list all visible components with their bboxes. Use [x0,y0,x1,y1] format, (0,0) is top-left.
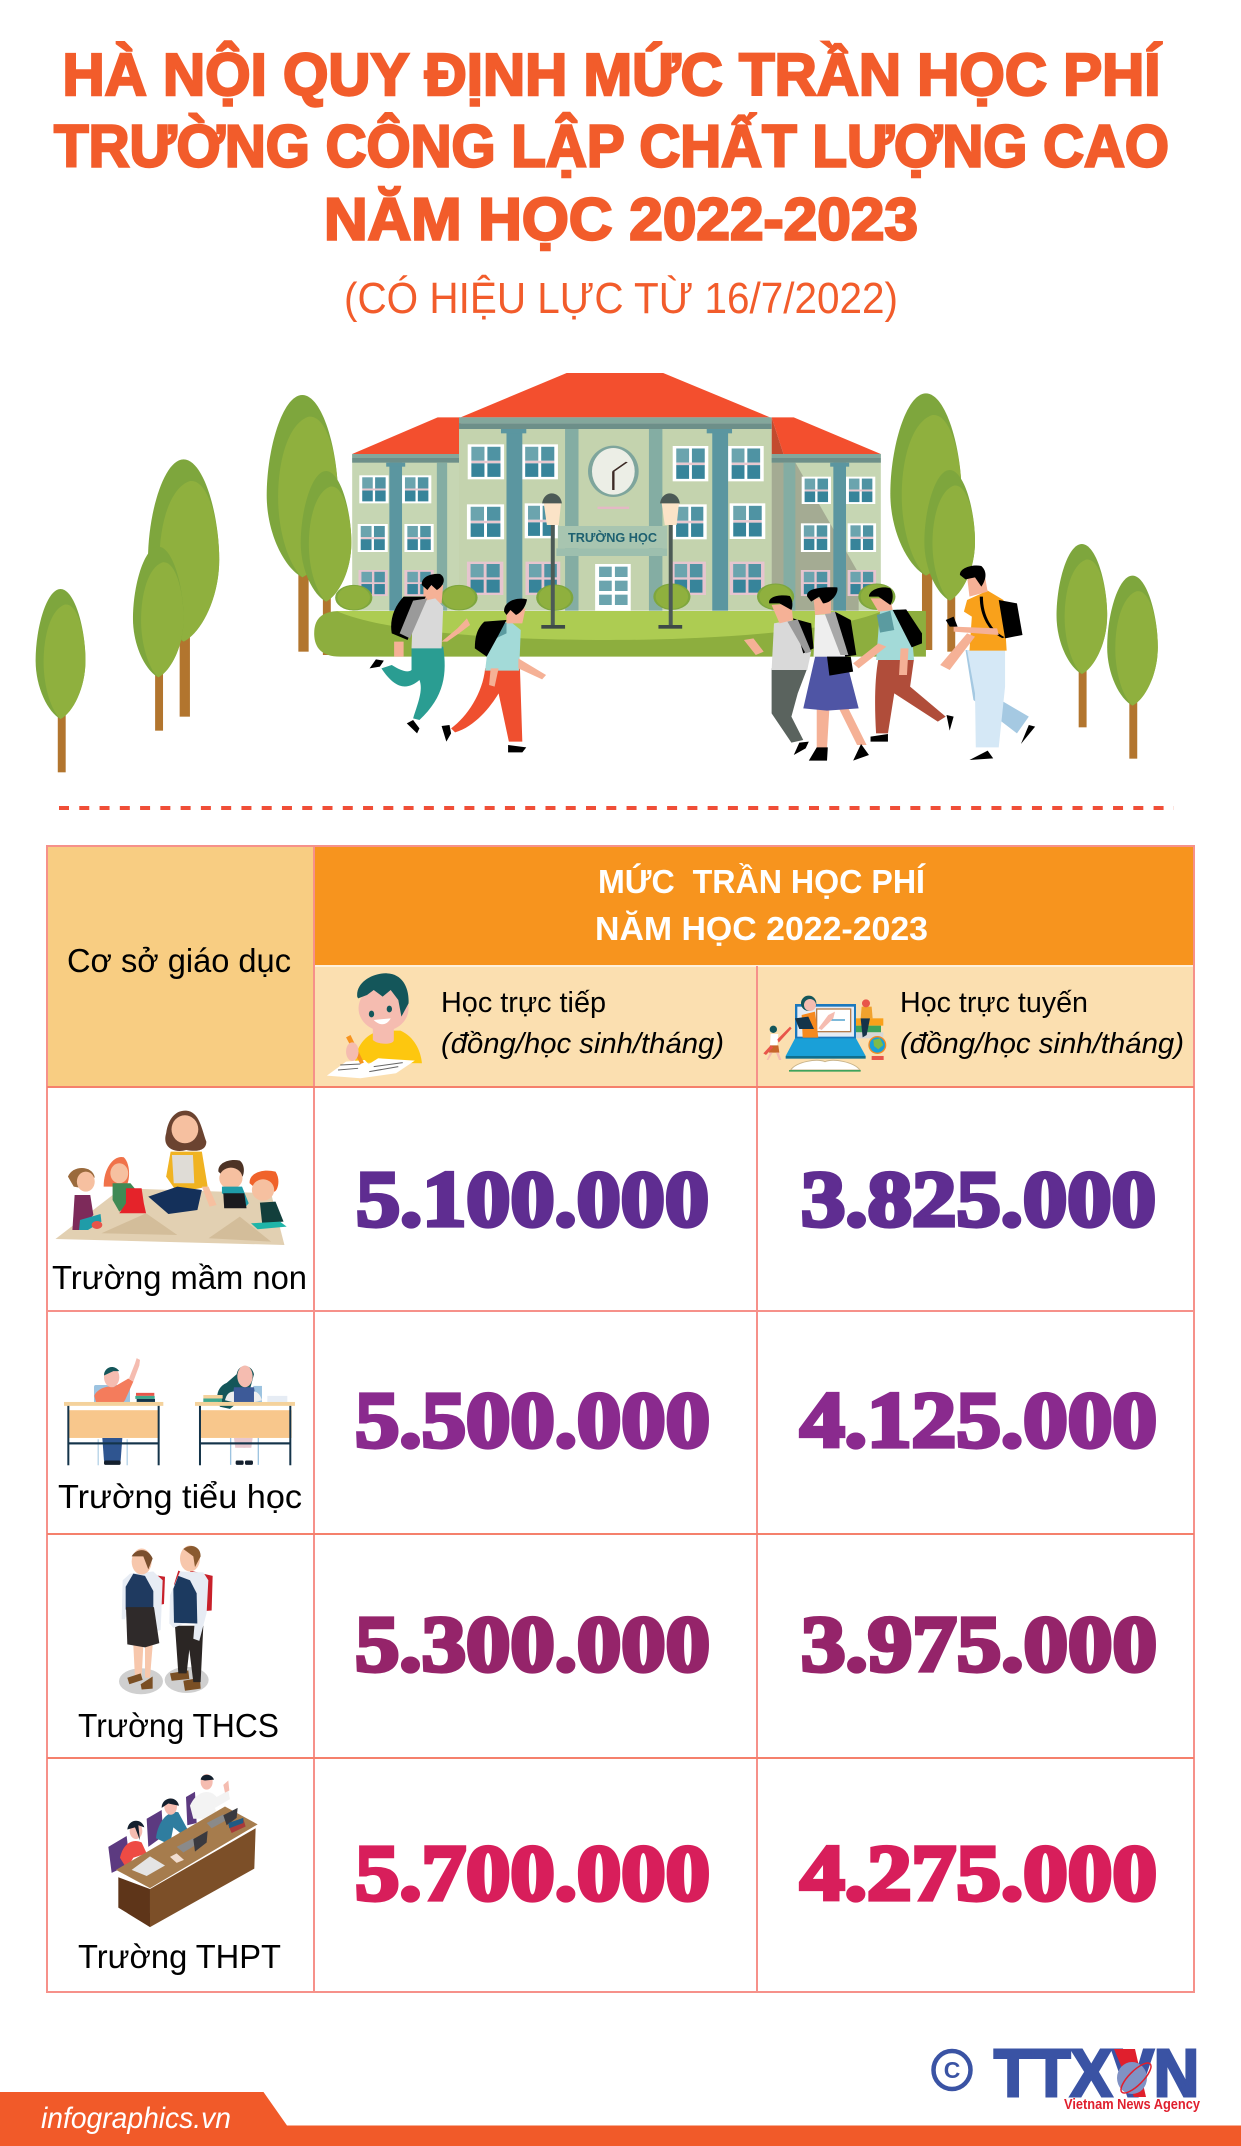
column label: in-person learning [441,987,724,1060]
icon: student in blue skirt [803,587,869,761]
row: preschool [52,1111,307,1297]
column label: online learning: Học trực tuyến [900,987,1088,1019]
value: lower secondary online: 3.975.000 [801,1602,1157,1688]
heading: education institution column: Cơ sở giáo dục [67,943,291,980]
value: upper secondary in-person: 5.700.000 [355,1830,710,1918]
school sign text: TRƯỜNG HỌC [568,530,658,545]
row: primary school [58,1358,302,1516]
footer site name: infographics.vn [41,2102,231,2135]
icon: two students in uniform [119,1545,213,1694]
value: preschool in-person: 5.100.000 [356,1156,709,1244]
logo: TTXVN Vietnam News Agency: TTXVN [994,2036,1199,2111]
icon: student in grey trousers [744,595,814,755]
subtitle: effective date: (CÓ HIỆU LỰC TỪ 16/7/2022) [344,274,898,323]
label: preschool: Trường mầm non [52,1260,307,1297]
footer bar [0,2092,1241,2146]
icon: clock [588,446,639,497]
label: lower secondary school: Trường THCS [78,1708,279,1745]
table grid [47,846,1194,1992]
icon: trees on the left [36,459,219,772]
title [54,41,1169,252]
value: upper secondary online: 4.275.000 [800,1830,1157,1918]
column label: in-person learning: Học trực tiếp [441,987,606,1019]
icon: child studying with a book [327,973,422,1078]
title: HÀ NỘI QUY ĐỊNH MỨC TRẦN HỌC PHÍ [62,41,1162,108]
column label: in-person learning: (đồng/học sinh/tháng) [441,1028,724,1060]
icon: student in brown trousers [853,587,954,742]
icon: shrubs [336,584,894,610]
label: upper secondary school: Trường THPT [78,1939,281,1976]
logo: copyright mark: C [944,2057,960,2083]
icon: online teacher on laptop [763,996,886,1072]
heading: tuition ceiling: MỨC TRẦN HỌC PHÍ [598,863,926,900]
icon: student in red trousers [442,599,546,752]
icon: students with laptops at a long desk [108,1774,258,1927]
title: TRƯỜNG CÔNG LẬP CHẤT LƯỢNG CAO [54,112,1169,180]
value: primary in-person: 5.500.000 [355,1378,710,1464]
title: NĂM HỌC 2022-2023 [324,186,918,252]
icon: lamp posts [541,493,682,629]
icon: two pupils at desks [64,1358,295,1465]
icon: school building [352,373,881,611]
icon: teacher with children on a mat [55,1111,287,1245]
heading: tuition ceiling: NĂM HỌC 2022-2023 [595,910,928,947]
label: primary school: Trường tiểu học [58,1479,302,1516]
value: lower secondary in-person: 5.300.000 [355,1602,710,1688]
icon: lawn and hedge [314,611,926,657]
icon: student in orange shirt [940,566,1035,760]
table: tuition ceilings [47,846,1194,1992]
icon: trees behind the school [267,393,975,655]
row: lower secondary school [78,1545,279,1745]
logo: TTXVN Vietnam News Agency: Vietnam News Agency [1064,2096,1201,2113]
icon: student running in teal trousers [370,574,470,733]
logo: copyright mark [934,2051,970,2089]
icon: trees on the right [1057,544,1158,759]
value: primary online: 4.125.000 [800,1378,1157,1464]
value: preschool online: 3.825.000 [801,1156,1156,1244]
column label: online learning [900,987,1184,1060]
table header backgrounds [47,846,1194,1087]
row: upper secondary school [78,1774,281,1976]
heading: tuition ceiling [595,863,928,947]
illustration: school building, trees and students [36,373,1158,772]
column label: online learning: (đồng/học sinh/tháng) [900,1028,1184,1060]
